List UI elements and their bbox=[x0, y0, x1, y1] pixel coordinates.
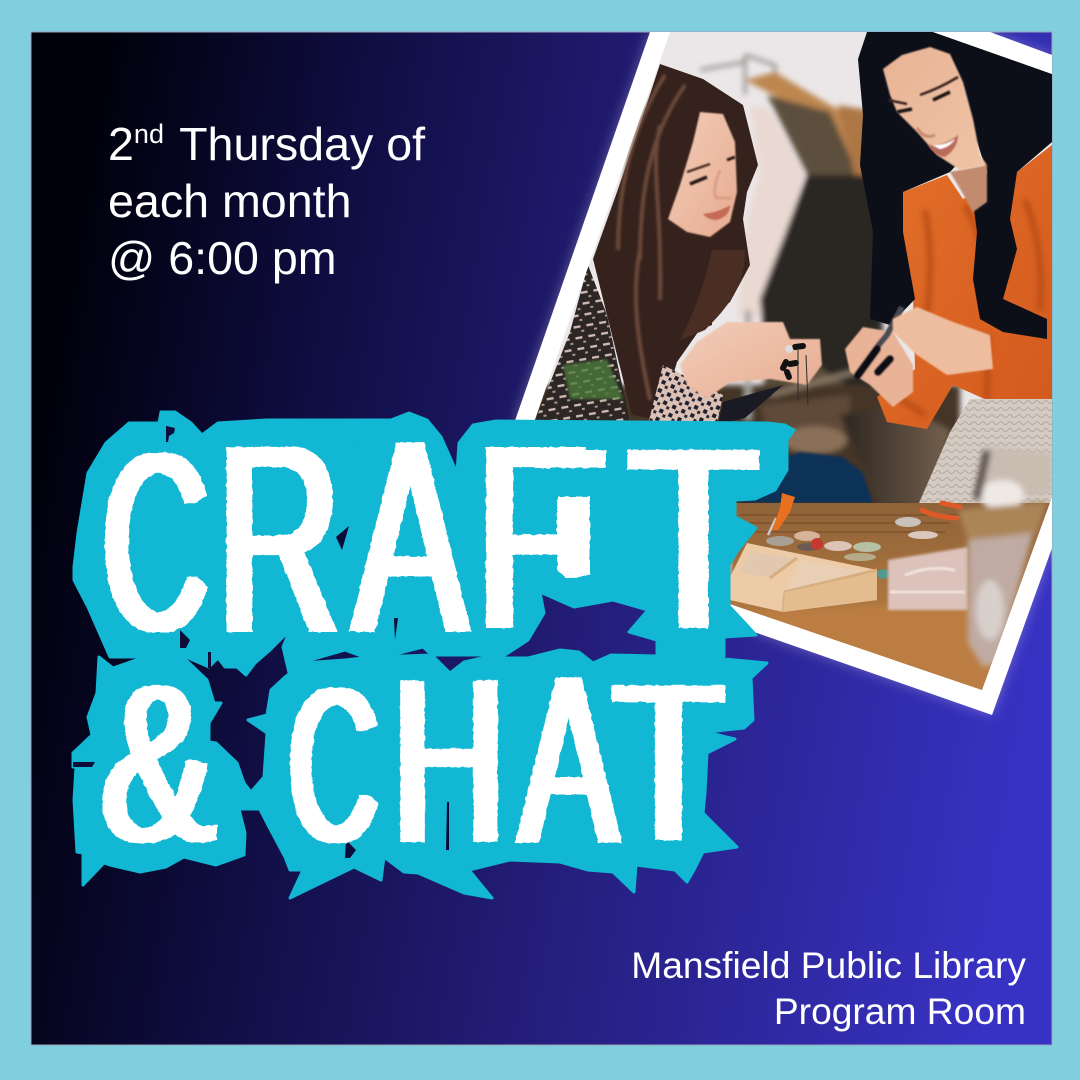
photo background wall bbox=[546, 32, 1052, 416]
left woman: patterned top bbox=[534, 265, 630, 424]
schedule text: @ 6:00 pm bbox=[108, 232, 337, 284]
title badge: teal torn outline bbox=[73, 412, 794, 898]
left woman: hands bbox=[680, 322, 822, 399]
left woman: scarf bbox=[708, 322, 712, 326]
right woman: face bbox=[883, 47, 987, 170]
title: CRAFT & CHAT bbox=[101, 383, 759, 895]
wooden tray bbox=[730, 543, 877, 612]
left woman: face bbox=[668, 112, 737, 237]
photo: white frame bbox=[484, 32, 1052, 715]
navy trousers bbox=[735, 452, 873, 503]
title line 1: F bbox=[476, 392, 588, 685]
title line 2: & bbox=[101, 638, 215, 890]
title line 1 bbox=[102, 383, 759, 691]
teal outline: ampersand bbox=[73, 657, 264, 885]
left woman: hair bbox=[593, 64, 758, 420]
title line 1: T bbox=[628, 393, 759, 683]
left woman: green patch bbox=[563, 359, 623, 399]
location text: Mansfield Public Library bbox=[631, 944, 1026, 986]
photo frame glow bbox=[515, 32, 1052, 715]
schedule text: nd bbox=[134, 119, 164, 149]
wooden table bbox=[730, 503, 1050, 690]
left woman: eyes and lips bbox=[687, 157, 735, 220]
schedule text: 2 bbox=[108, 118, 134, 170]
teal outline: CRAFT bbox=[74, 412, 794, 677]
title line 1: A bbox=[353, 383, 467, 691]
blurred area behind table bbox=[730, 560, 734, 576]
title line 2: T bbox=[612, 636, 725, 888]
photo: two women making jewellery bbox=[534, 32, 1052, 690]
jewellery pieces bbox=[766, 517, 938, 579]
right woman: hair bbox=[858, 32, 1052, 339]
right woman: eyes, mouth bbox=[888, 77, 958, 157]
title line 2: A bbox=[519, 626, 618, 895]
title line 2 bbox=[101, 626, 725, 895]
title line 1: letter F drop stroke bbox=[540, 450, 601, 578]
clear plastic boxes bbox=[888, 547, 968, 610]
left woman: sleeves bbox=[648, 365, 723, 424]
right woman: orange shirt bbox=[877, 145, 1052, 429]
title line 1: C bbox=[102, 400, 209, 684]
location text: Program Room bbox=[774, 990, 1026, 1032]
schedule text: Thursday of bbox=[167, 118, 426, 170]
right woman: neck bbox=[950, 165, 987, 212]
teal outline: CHAT bbox=[248, 650, 767, 898]
left woman: jewellery bbox=[783, 346, 803, 377]
right woman: lace skirt bbox=[919, 399, 1052, 505]
title line 2: C bbox=[289, 641, 378, 888]
orange tool bbox=[768, 518, 776, 535]
title line 1: R bbox=[218, 388, 340, 689]
title outline tears bbox=[73, 426, 449, 858]
orange pliers on table bbox=[922, 503, 960, 518]
schedule text: each month bbox=[108, 175, 351, 227]
right woman: hands with pliers bbox=[845, 307, 993, 407]
clothing rack bbox=[534, 51, 965, 503]
glass jar bbox=[958, 447, 1052, 667]
title line 2: H bbox=[392, 630, 506, 893]
